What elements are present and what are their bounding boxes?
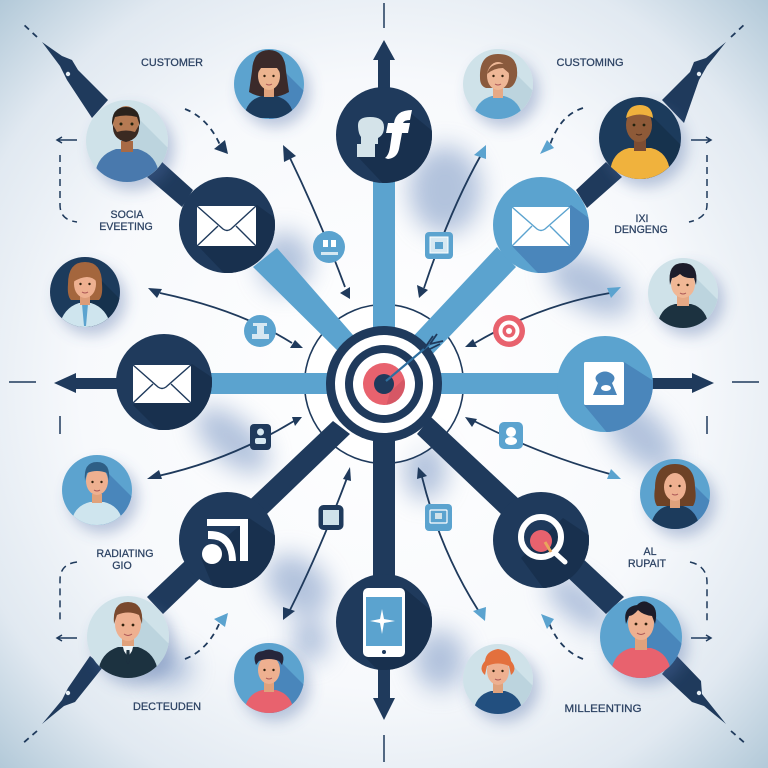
label: radiating gio: GIO xyxy=(112,560,132,572)
label: al rupait: RUPAIT xyxy=(628,558,667,570)
avatar: woman with light shirt xyxy=(50,257,150,329)
spoke: top-right outer xyxy=(576,162,622,208)
spike: bottom-left xyxy=(42,656,103,724)
arrow: right xyxy=(648,373,714,393)
connector: top-left vertical xyxy=(283,145,350,299)
outer thin ring around target xyxy=(304,304,464,464)
small icon: top-left badge xyxy=(313,231,345,263)
small icon: bottom-left square xyxy=(318,505,344,530)
bracket: bottom-right xyxy=(690,562,711,641)
dart xyxy=(386,344,430,381)
label: socia eveeting: SOCIA xyxy=(111,209,144,221)
hub: top-left envelope xyxy=(179,177,275,273)
bracket: bottom-left xyxy=(57,562,77,641)
letter f xyxy=(385,110,412,159)
avatar: bearded man xyxy=(86,100,202,183)
hub: top-right envelope xyxy=(493,177,589,273)
label: customing: CUSTOMING xyxy=(556,57,624,69)
small icon: bottom-right badge xyxy=(425,504,452,531)
target xyxy=(326,326,443,442)
avatar: woman with curly hair xyxy=(640,459,740,531)
hub: right document xyxy=(558,336,653,432)
spoke: top-left blue xyxy=(253,248,360,360)
avatar: woman with bob xyxy=(463,49,563,121)
spoke: top-right blue xyxy=(407,247,516,362)
hub: bottom-right magnifier xyxy=(493,492,589,588)
connector: left upper xyxy=(148,288,303,348)
spoke: top blue xyxy=(373,170,395,340)
small icon: left lower badge xyxy=(250,424,271,450)
avatar: person with orange hair xyxy=(463,644,563,716)
spoke: bottom navy xyxy=(373,430,395,590)
silhouette xyxy=(357,117,384,157)
small icon: left upper badge xyxy=(244,315,276,347)
connector: bottom-left vertical xyxy=(283,467,351,620)
label: dengeng: DENGENG xyxy=(614,224,668,236)
avatar: boy with light shirt xyxy=(62,455,162,527)
label: milleenting: MILLEENTING xyxy=(564,703,642,715)
bracket: top-left xyxy=(57,137,77,222)
arrow: down xyxy=(373,665,395,720)
label: al rupait: AL xyxy=(644,546,657,558)
arrow: up xyxy=(373,40,395,90)
bracket: top-right xyxy=(689,137,711,222)
spike: top-right xyxy=(662,42,726,123)
spoke: left blue xyxy=(195,373,340,394)
connector arrows xyxy=(147,145,621,621)
small icon: right lower badge xyxy=(499,422,523,449)
spoke: bottom-left navy xyxy=(147,421,350,614)
tapered spikes xyxy=(42,42,726,724)
spoke: top-left outer xyxy=(147,162,193,207)
soft shadow blobs xyxy=(144,146,689,690)
spoke: right blue xyxy=(430,373,570,394)
avatar: man with dark sweater xyxy=(648,258,748,330)
spoke: bottom-right navy xyxy=(417,417,624,614)
avatar: woman with fringe xyxy=(234,49,334,121)
dashed arrow: bottom-left xyxy=(185,613,228,659)
label: radiating gio: RADIATING xyxy=(97,548,153,560)
avatar: man in suit xyxy=(87,596,203,679)
connector: top-right vertical xyxy=(417,145,486,298)
label: decteuden: DECTEUDEN xyxy=(133,701,201,713)
hub: top facebook xyxy=(336,87,432,183)
label: dengeng: IXI xyxy=(636,213,648,225)
dashed arrow: top-left xyxy=(185,109,228,154)
dashed arrow: bottom-right xyxy=(541,614,583,659)
hub: left envelope xyxy=(116,334,212,430)
connector: left lower xyxy=(147,417,302,479)
avatar: man in red shirt xyxy=(600,596,716,679)
hub: bottom-left rss xyxy=(179,492,275,588)
spike: bottom-right xyxy=(662,656,726,724)
small icon: top-right badge xyxy=(425,232,453,259)
label: customer: CUSTOMER xyxy=(141,57,203,69)
hub: bottom phone xyxy=(336,575,432,670)
avatar: man with yellow headband xyxy=(599,97,715,180)
label: socia eveeting: EVEETING xyxy=(99,221,153,233)
connector: bottom-right vertical xyxy=(417,467,486,621)
small icon: target badge xyxy=(493,315,525,347)
spokes xyxy=(147,162,624,614)
avatar: person in red top xyxy=(234,643,334,715)
spike: top-left xyxy=(42,42,108,118)
dashed arrow: top-right xyxy=(540,108,583,154)
side brackets xyxy=(57,137,711,641)
connector: right upper xyxy=(465,287,621,347)
connector: right lower xyxy=(465,417,621,479)
arrow: left xyxy=(54,373,120,393)
